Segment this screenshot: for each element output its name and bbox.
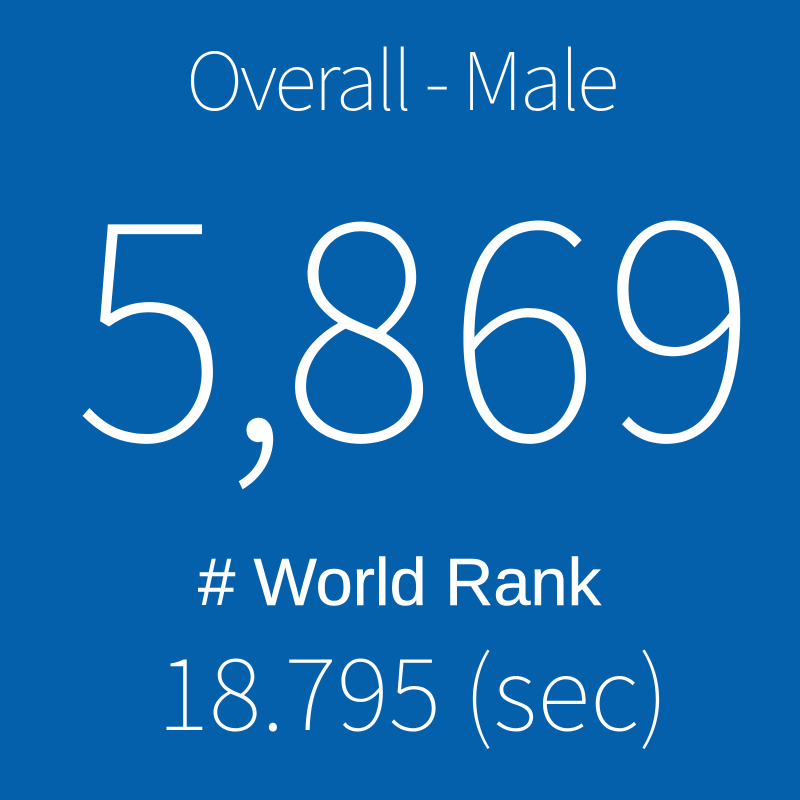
time value: 18.795 (sec) bbox=[157, 614, 669, 759]
big number: world rank: 5,869 bbox=[74, 95, 758, 526]
label: world rank: # World Rank bbox=[198, 545, 602, 620]
title: Overall - Male bbox=[186, 18, 619, 134]
